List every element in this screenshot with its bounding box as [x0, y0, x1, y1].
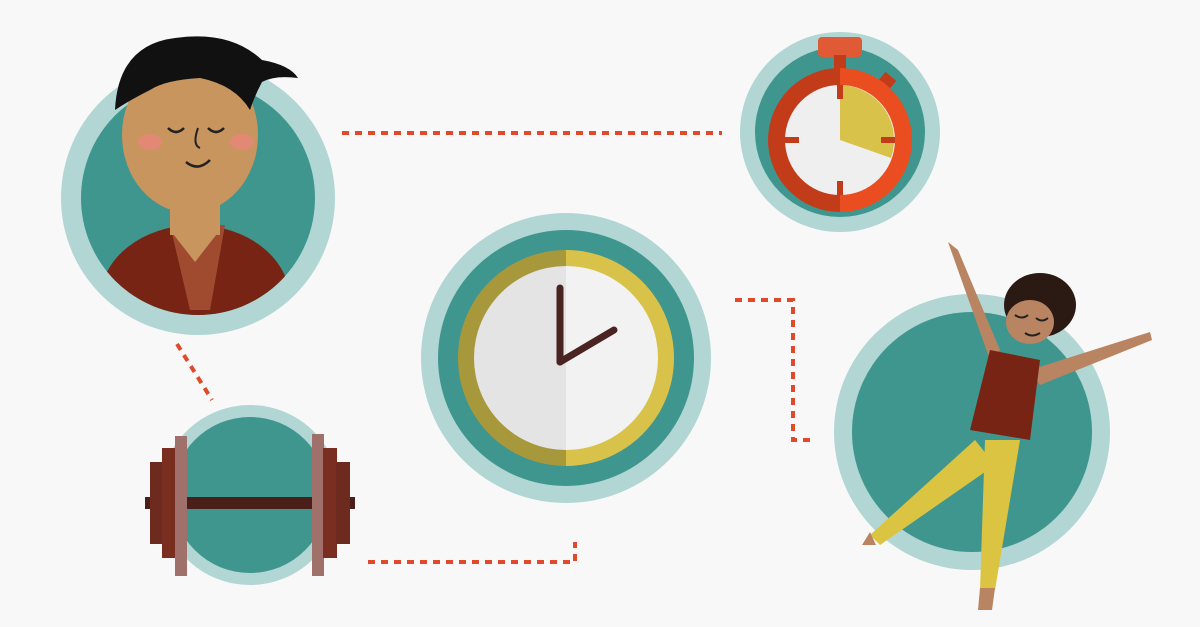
eyes, nose, mouth	[168, 128, 184, 132]
dotted connector: dumbbell to clock	[368, 542, 575, 562]
right plates	[312, 434, 324, 576]
buttons	[818, 37, 862, 57]
left plates	[150, 462, 164, 544]
legs	[870, 440, 995, 545]
cheeks	[138, 134, 162, 150]
hands	[556, 288, 564, 362]
bar	[145, 497, 355, 509]
head & hair	[1004, 273, 1076, 337]
shirt	[107, 228, 285, 315]
head	[122, 57, 258, 213]
panel: man avatar	[61, 36, 335, 335]
hair	[115, 36, 298, 110]
torso	[970, 350, 1040, 440]
body	[840, 68, 912, 212]
panel: dumbbell	[145, 405, 355, 585]
dotted connector: man to dumbbell	[177, 344, 212, 400]
panel: woman	[834, 242, 1152, 610]
panel: clock	[421, 213, 711, 503]
panel: stopwatch	[740, 32, 940, 232]
dotted connector: man to stopwatch	[342, 131, 722, 135]
arms	[948, 242, 1000, 360]
dotted connector: clock to woman	[735, 300, 814, 440]
ticks	[837, 85, 843, 99]
